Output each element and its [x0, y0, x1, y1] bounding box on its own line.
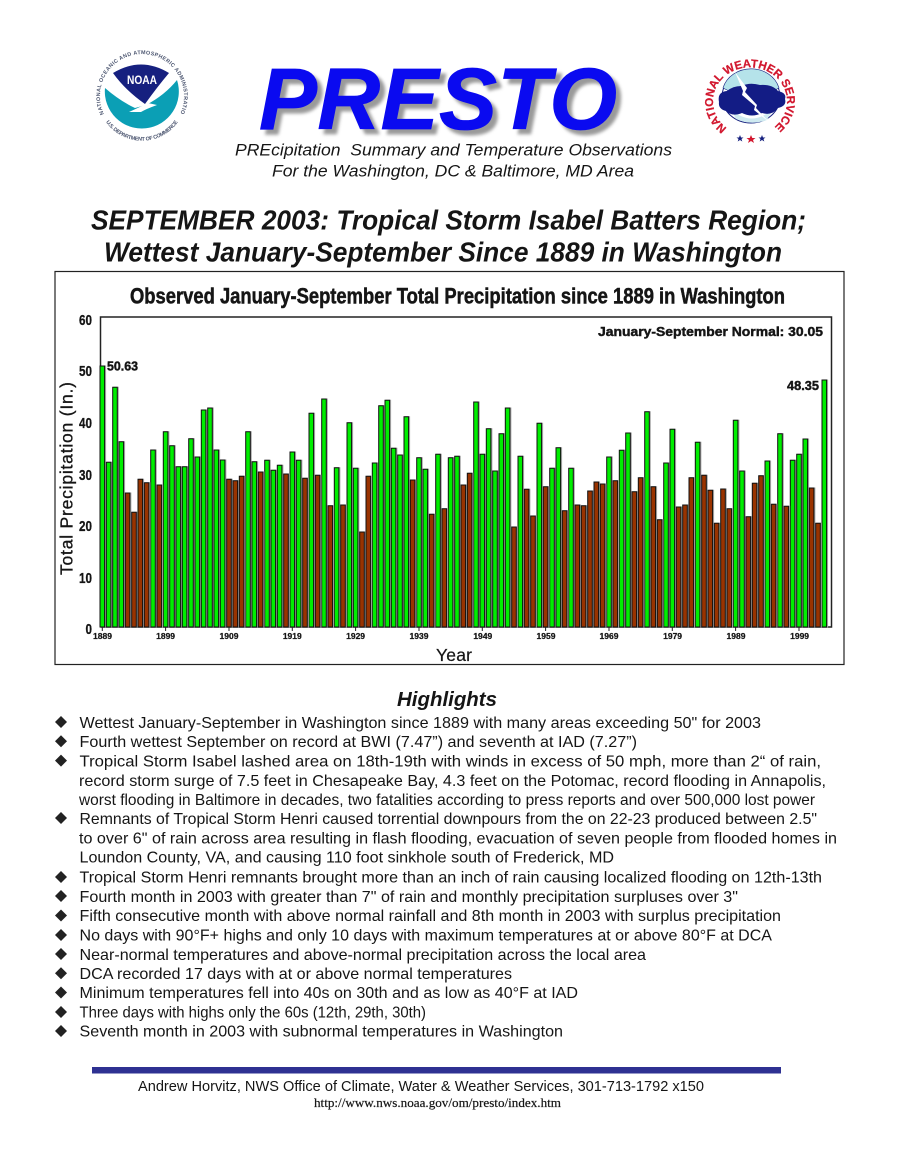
normal label: January-September Normal: 30.05 [598, 324, 823, 339]
footer credit: Andrew Horvitz, NWS Office of Climate, Water & Weather Services, 301-713-1792 x150 [138, 1079, 704, 1095]
bullet: no 90 degree days: No days with 90°F+ highs and only 10 days with maximum temperatures at or above 80°F at DCA [80, 928, 773, 945]
x axis labels: 1959 [537, 631, 556, 641]
y axis labels: 10 [79, 570, 92, 587]
subtitle: For the Washington, DC & Baltimore, MD Area [272, 162, 634, 180]
chart title: Observed January-September Total Precipitation since 1889 in Washington [130, 284, 785, 308]
footer url: http://www.nws.noaa.gov/om/presto/index.htm [314, 1096, 561, 1110]
x axis labels: 1969 [600, 631, 619, 641]
x axis labels: 1999 [790, 631, 809, 641]
bullet: DCA: DCA recorded 17 days with at or above normal temperatures [80, 966, 512, 983]
inner dial [722, 71, 780, 123]
x axis title: Year [436, 645, 472, 665]
bar chart: years below normal [125, 472, 820, 627]
title: PRESTO wordmark: PRESTO [259, 51, 617, 148]
icon: NOAA logo [96, 50, 188, 141]
bullet: wettest: Wettest January-September in Washington since 1889 with many areas exceeding 50" for 2003 [80, 715, 761, 732]
bullet: minimum temperatures: Minimum temperatures fell into 40s on 30th and as low as 40°F at IAD [80, 985, 578, 1002]
y axis labels: 50 [79, 363, 92, 380]
subtitle [235, 140, 673, 180]
stars [736, 135, 766, 143]
ring text bottom: U.S. DEPARTMENT OF COMMERCE [106, 120, 178, 141]
plot frame [100, 317, 832, 627]
icon: National Weather Service logo [704, 59, 795, 143]
heading [91, 204, 806, 268]
x axis labels [93, 631, 809, 641]
bullet: Isabel: record storm surge of 7.5 feet in Chesapeake Bay, 4.3 feet on the Potomac, record flooding in Annapolis, [79, 773, 826, 790]
y axis labels: 60 [79, 312, 92, 329]
bar chart: years above normal [100, 366, 827, 627]
callout: 1889 value: 50.63 [107, 358, 138, 374]
heading: Wettest January-September Since 1889 in Washington [104, 236, 782, 268]
bullet: Henri remnants [55, 811, 837, 867]
footer rule [92, 1067, 781, 1074]
gull wing [129, 103, 157, 112]
heading: SEPTEMBER 2003: Tropical Storm Isabel Batters Region; [91, 204, 806, 236]
navy upper field [113, 64, 169, 104]
y axis labels: 40 [79, 415, 92, 432]
bullet: fourth wettest: Fourth wettest September on record at BWI (7.47”) and seventh at IAD (7.27”) [80, 734, 637, 751]
bullet: Henri remnants: Loundon County, VA, and causing 110 foot sinkhole south of Frederick, MD [80, 850, 614, 867]
x axis ticks [102, 627, 799, 631]
lightning bolt [735, 72, 769, 122]
highlights heading: Highlights [397, 689, 497, 711]
y axis labels: 30 [79, 467, 92, 484]
bullet: Isabel: worst flooding in Baltimore in decades, two fatalities according to press reports and over 500,000 lost power [78, 792, 815, 809]
y axis title: Total Precipitation (In.) [56, 382, 76, 575]
NOAA wordmark: NOAA [127, 75, 157, 87]
storm cloud [719, 84, 785, 116]
bullet: Henri remnants: to over 6" of rain across area resulting in flash flooding, evacuation of seven people from flooded homes in [79, 830, 837, 847]
bullet: highs in 60s: Three days with highs only the 60s (12th, 29th, 30th) [80, 1004, 426, 1022]
bullet: Henri remnants: Remnants of Tropical Storm Henri caused torrential downpours from the on 22-23 produced between 2.5" [80, 811, 817, 828]
x axis labels: 1919 [283, 631, 302, 641]
y axis labels [79, 312, 92, 638]
y axis labels: 0 [86, 621, 92, 638]
callout: 2003 value: 48.35 [787, 378, 819, 393]
x axis labels: 1899 [156, 631, 175, 641]
bullet: localized flooding: Tropical Storm Henri remnants brought more than an inch of rain causing localized flooding on 12th-13th [80, 870, 822, 887]
panel: highlights [55, 689, 837, 1041]
subtitle: PREcipitation Summary and Temperature Observations [235, 140, 673, 160]
bullet: seventh month: Seventh month in 2003 with subnormal temperatures in Washington [80, 1024, 563, 1041]
x axis labels: 1929 [346, 631, 365, 641]
x axis labels: 1939 [410, 631, 429, 641]
x axis labels: 1989 [727, 631, 746, 641]
title: PRESTO wordmark: PRESTO [264, 56, 622, 153]
bullet: fourth month: Fourth month in 2003 with greater than 7" of rain and monthly precipitation surpluses over 3" [80, 889, 738, 906]
panel: precipitation chart [55, 272, 844, 665]
bullet: Isabel [55, 754, 826, 809]
x axis labels: 1889 [93, 631, 112, 641]
x axis labels: 1949 [473, 631, 493, 641]
bullet: near-normal: Near-normal temperatures and above-normal precipitation across the local area [80, 947, 646, 964]
bullet: Isabel: Tropical Storm Isabel lashed area on 18th-19th with winds in excess of 50 mph, more than 2“ of rain, [80, 754, 821, 771]
x axis labels: 1979 [663, 631, 682, 641]
bullet: fifth month: Fifth consecutive month with above normal rainfall and 8th month in 2003 with surplus precipitation [80, 908, 781, 925]
ring text: NATIONAL WEATHER SERVICE [704, 59, 795, 134]
x axis labels: 1909 [220, 631, 239, 641]
teal lower field [105, 80, 179, 129]
y axis labels: 20 [79, 518, 92, 535]
